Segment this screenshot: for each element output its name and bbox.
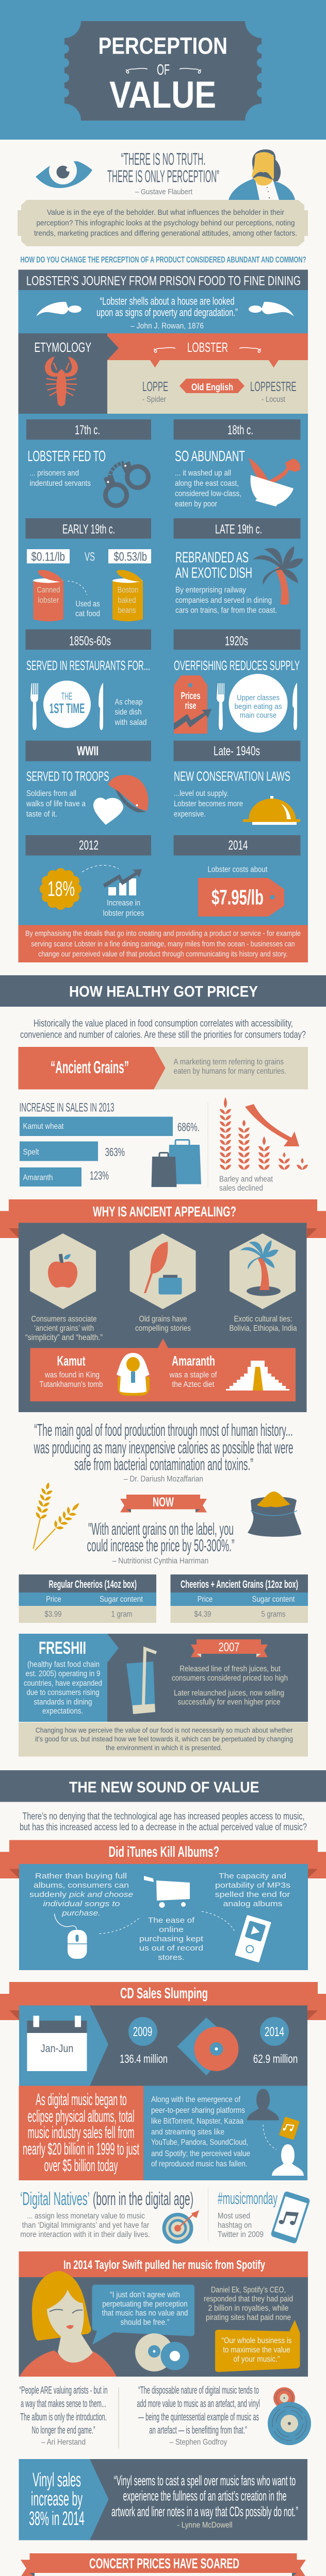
icon: rising chart bbox=[103, 869, 142, 895]
panel: peer to peer sharing: like BitTorrent, Napster, Kazaa bbox=[151, 2117, 243, 2126]
table: regular cheerios bbox=[19, 1574, 156, 1623]
icon: eye bbox=[36, 157, 92, 188]
timeline: WWII: SERVED TO TROOPS bbox=[26, 769, 109, 784]
icon: lobster shells bbox=[36, 302, 294, 316]
icon: declining wheat chart bbox=[219, 1097, 308, 1193]
banner: 2007 bbox=[191, 1639, 268, 1657]
stat: 2014 sales bbox=[253, 2017, 298, 2065]
etymology words: LOPPE bbox=[142, 379, 168, 394]
etymology words: - Locust bbox=[262, 395, 286, 404]
timeline: WWII: walks of life have a bbox=[26, 800, 86, 808]
timeline: 18th century: 18th c. bbox=[227, 423, 253, 437]
timeline: 1850s-60s: side dish bbox=[115, 708, 141, 717]
panel: ancient grains definition: eaten by humans for many centuries. bbox=[173, 1067, 286, 1076]
timeline: 1850s-60s bbox=[26, 630, 151, 730]
speech bubble: Ek quote: to maximise the value bbox=[223, 2346, 290, 2354]
panel: freshii: standards in dining bbox=[34, 1698, 92, 1706]
music intro text bbox=[20, 1811, 307, 1833]
timeline: early 19th century: $0.53/lb bbox=[113, 550, 147, 564]
Harriman quote bbox=[87, 1519, 234, 1565]
pick and choose text: pick and choose bbox=[69, 1891, 133, 1899]
speech bubble: swift quote: should be free.” bbox=[121, 2318, 169, 2327]
panel: freshii: FRESHII bbox=[39, 1638, 86, 1658]
intro plaque bbox=[18, 200, 308, 246]
timeline: late 19th century: companies and served in dining bbox=[175, 596, 272, 605]
digital natives block: than ‘Digital Immigrants’ and yet have far bbox=[22, 2221, 149, 2230]
reason: simplicity and health: Consumers associate bbox=[31, 1315, 97, 1324]
mp3 text: analog albums bbox=[223, 1900, 283, 1908]
panel: freshii: Later relaunched juices, now selling bbox=[174, 1689, 284, 1698]
mp3 text: spelled the end for bbox=[215, 1891, 290, 1899]
table: regular cheerios: Regular Cheerios (14oz box) bbox=[48, 1579, 137, 1590]
table: ancient grains cheerios: Sugar content bbox=[252, 1595, 295, 1604]
callout: kamut and amaranth stories: the Aztec diet bbox=[172, 1380, 215, 1389]
Mozaffarian quote: – Dr. Dariush Mozaffarian bbox=[124, 1475, 203, 1484]
panel: peer to peer sharing: Along with the emergence of bbox=[151, 2095, 240, 2104]
table: ancient grains cheerios: 5 grams bbox=[261, 1610, 286, 1619]
table: ancient grains cheerios: Price bbox=[198, 1595, 213, 1604]
musicmonday block: Twitter in 2009 bbox=[218, 2230, 264, 2239]
stat: 2014 sales: 62.9 million bbox=[253, 2052, 298, 2065]
section heading: new sound of value: THE NEW SOUND OF VALUE bbox=[69, 1779, 259, 1796]
panel: vinyl sales: increase by bbox=[31, 2488, 83, 2510]
online purchasing text: purchasing kept bbox=[139, 1935, 203, 1943]
timeline: late 19th century: AN EXOTIC DISH bbox=[175, 565, 252, 581]
section heading: new sound of value bbox=[0, 1770, 326, 1802]
callout: kamut and amaranth stories: Kamut bbox=[57, 1353, 86, 1368]
digital natives block: ... assign less monetary value to music bbox=[27, 2212, 145, 2221]
callout: kamut and amaranth stories: Tutankhamun's tomb bbox=[39, 1380, 103, 1389]
timeline: 18th century bbox=[173, 419, 300, 509]
speech bubble: swift quote: that music has no value and bbox=[102, 2309, 188, 2317]
timeline: WWII bbox=[26, 741, 151, 825]
icon: lobster can: lobster bbox=[38, 596, 59, 605]
reason: compelling stories: compelling stories bbox=[135, 1324, 191, 1333]
stat: 2009 sales: 136.4 million bbox=[120, 2052, 168, 2065]
timeline: late 1940s: expensive. bbox=[174, 810, 206, 819]
health intro text bbox=[20, 1018, 306, 1041]
timeline: 18th century: eaten by poor bbox=[175, 500, 217, 509]
timeline: late 19th century: By enterprising railway bbox=[175, 586, 246, 595]
price tag: $7.95/lb bbox=[211, 885, 264, 909]
callout: industry sales fall: music industry sales fell from bbox=[28, 2123, 134, 2142]
panel: ancient grains definition: A marketing term referring to grains bbox=[173, 1058, 284, 1066]
bar chart: increase in sales: 686%. bbox=[177, 1120, 200, 1133]
cat food note bbox=[68, 581, 100, 618]
panel: peer to peer sharing: of reproduced music has fallen. bbox=[151, 2160, 248, 2168]
Godfroy quote: – Stephen Godfroy bbox=[170, 2438, 227, 2447]
table: regular cheerios: 1 gram bbox=[111, 1610, 132, 1619]
timeline: 1850s-60s: with salad bbox=[115, 718, 146, 727]
timeline: WWII: Soldiers from all bbox=[26, 789, 76, 798]
musicmonday block: Most used bbox=[218, 2212, 250, 2221]
callout: industry sales fall: over $5 billion today bbox=[44, 2156, 118, 2175]
panel: peer to peer sharing: and Spotify; the perceived value bbox=[151, 2149, 250, 2158]
bar chart: increase in sales: Kamut wheat bbox=[23, 1122, 64, 1131]
title: VALUE bbox=[109, 74, 216, 116]
intro plaque: Value is in the eye of the beholder. But what influences the beholder in their bbox=[47, 208, 284, 217]
timeline: 17th century: indentured servants bbox=[30, 479, 91, 488]
timeline: 1850s-60s: SERVED IN RESTAURANTS FOR... bbox=[26, 657, 150, 673]
panel: freshii: due to consumers rising bbox=[27, 1688, 99, 1697]
musicmonday block bbox=[218, 2189, 311, 2244]
timeline: 17th century: ... prisoners and bbox=[30, 469, 79, 478]
icon: compact disc bbox=[177, 2018, 238, 2075]
speech bubble: swift quote: perpetuating the perception bbox=[102, 2300, 188, 2309]
price tag bbox=[198, 878, 284, 917]
icon: plate and cutlery: 1ST TIME bbox=[50, 701, 85, 716]
stat: 2014 sales: 2014 bbox=[265, 2025, 284, 2039]
panel: freshii bbox=[19, 1634, 308, 1722]
banner: 2007: 2007 bbox=[219, 1640, 239, 1654]
icon: main course plate: begin eating as bbox=[234, 702, 282, 711]
icon: lobster can: Canned bbox=[37, 586, 60, 595]
callout: industry sales fall: As digital music began to bbox=[36, 2090, 127, 2109]
cat food note: cat food bbox=[75, 609, 100, 618]
cat food note: Used as bbox=[75, 600, 100, 608]
mp3 text bbox=[215, 1872, 290, 1908]
timeline: 2014 bbox=[173, 835, 300, 917]
panel: peer to peer sharing bbox=[143, 2086, 307, 2180]
cd heading: CD Sales Slumping bbox=[120, 1986, 208, 2002]
intro plaque: perception? This infographic looks at the psychology behind our perceptions, noting bbox=[36, 218, 295, 228]
bar chart: increase in sales: 363% bbox=[105, 1145, 125, 1159]
icon: calendar bbox=[27, 2015, 87, 2071]
reason: simplicity and health: ‘ancient grains’ with bbox=[34, 1324, 94, 1333]
timeline: 1920s bbox=[173, 630, 300, 734]
bar chart: increase in sales bbox=[20, 1100, 200, 1187]
icon: shopping bags bbox=[152, 1140, 201, 1187]
badge: 18 percent bbox=[40, 868, 82, 910]
icon: price tag rising: Prices bbox=[181, 691, 200, 702]
lobster word: LOBSTER bbox=[187, 340, 228, 355]
timeline: 2014: Lobster costs about bbox=[207, 866, 268, 874]
online purchasing text: online bbox=[159, 1926, 184, 1934]
speech bubble: swift quote: “I just don’t agree with bbox=[110, 2291, 180, 2299]
icon: shopping cart bbox=[144, 1876, 190, 1908]
icon: target bbox=[162, 2210, 199, 2244]
panel: vinyl sales bbox=[19, 2459, 307, 2540]
Daniel Ek response: 2 billion in royalties, while bbox=[208, 2304, 289, 2313]
stat: 2009 sales: 2009 bbox=[133, 2025, 152, 2039]
timeline: late 1940s: Lobster becomes more bbox=[174, 800, 243, 808]
reason: compelling stories: Old grains have bbox=[139, 1315, 187, 1324]
Herstand quote: – Ari Herstand bbox=[41, 2438, 86, 2447]
timeline: WWII: WWII bbox=[77, 744, 99, 758]
Godfroy quote: an artefact — is benefitting from that.” bbox=[149, 2425, 247, 2436]
Herstand quote: “People ARE valuing artists - but in bbox=[20, 2385, 108, 2396]
timeline: early 19th century: VS bbox=[85, 550, 95, 564]
icon: mortar with claws bbox=[249, 458, 300, 506]
table: ancient grains cheerios: $4.39 bbox=[194, 1610, 211, 1619]
callout: industry sales fall bbox=[19, 2086, 143, 2180]
Flaubert quote: – Gustave Flaubert bbox=[135, 188, 193, 196]
musicmonday block: hashtag on bbox=[218, 2221, 252, 2230]
online purchasing text bbox=[139, 1917, 203, 1962]
musicmonday block: #musicmonday bbox=[218, 2189, 278, 2208]
digital natives block bbox=[20, 2188, 199, 2244]
timeline: WWII: taste of it. bbox=[26, 810, 57, 819]
icon: main course plate bbox=[217, 674, 297, 733]
panel: cd sales slumping bbox=[0, 1982, 326, 2180]
panel: vinyl sales: 38% in 2014 bbox=[29, 2508, 85, 2530]
Rowan quote: – John J. Rowan, 1876 bbox=[131, 321, 204, 331]
food takeaway band: the environment in which it is presented. bbox=[106, 1743, 222, 1752]
timeline: late 1940s: Late- 1940s bbox=[214, 744, 260, 758]
icon: file sharing people bbox=[247, 2089, 304, 2176]
illustration: Taylor Swift bbox=[20, 2271, 117, 2377]
icon: grain sack bbox=[248, 1492, 301, 1537]
food takeaway band: Changing how we perceive the value of our food is not necessarily so much about whether bbox=[36, 1726, 293, 1734]
timeline: early 19th century: EARLY 19th c. bbox=[62, 522, 115, 537]
icon: beans can: Boston bbox=[118, 586, 138, 595]
panel: vinyl sales: Vinyl sales bbox=[32, 2469, 81, 2491]
timeline: 17th century bbox=[26, 419, 151, 506]
panel: peer to peer sharing: and streaming sites like bbox=[151, 2128, 224, 2137]
timeline: late 19th century: cars on trains, far from the coast. bbox=[175, 606, 277, 615]
timeline: 1850s-60s: 1850s-60s bbox=[69, 634, 111, 648]
Harriman quote: – Nutritionist Cynthia Harriman bbox=[112, 1557, 208, 1565]
timeline: 1920s: 1920s bbox=[225, 634, 248, 648]
panel: taylor swift and spotify bbox=[19, 2251, 308, 2377]
table: ancient grains cheerios bbox=[170, 1574, 308, 1623]
timeline: late 1940s: ...level out supply. bbox=[174, 789, 229, 798]
timeline: 17th century: 17th c. bbox=[75, 423, 100, 437]
speech bubble: Ek quote bbox=[215, 2320, 300, 2372]
pick and choose text bbox=[29, 1872, 133, 1918]
table: regular cheerios: Sugar content bbox=[100, 1595, 143, 1604]
bar chart: increase in sales: INCREASE IN SALES IN 2013 bbox=[20, 1100, 115, 1115]
intro plaque: trends, marketing practices and differing generational attitudes, among other factors. bbox=[34, 229, 297, 238]
icon: pharaoh bbox=[117, 1353, 150, 1396]
panel: lobster journey bbox=[19, 270, 308, 962]
icon: helmet and heart bbox=[93, 775, 149, 825]
reason: exotic ties: Exotic cultural ties: bbox=[234, 1315, 292, 1324]
digital natives block: ‘Digital Natives’ bbox=[20, 2188, 90, 2209]
title: PERCEPTION bbox=[98, 33, 227, 59]
icon: price tag rising: rise bbox=[185, 701, 196, 711]
reason: exotic ties: Bolivia, Ethiopia, India bbox=[229, 1324, 297, 1333]
Herstand quote: No longer the end game.” bbox=[32, 2425, 95, 2436]
online purchasing text: us out of record bbox=[139, 1944, 203, 1953]
etymology heading: ETYMOLOGY bbox=[34, 340, 91, 355]
icon: declining wheat chart: Barley and wheat bbox=[219, 1175, 273, 1184]
callout: kamut and amaranth stories: Amaranth bbox=[172, 1353, 215, 1368]
icon: wheat ears bbox=[27, 1481, 84, 1555]
icon: lobster can bbox=[33, 570, 63, 621]
lobster takeaway band bbox=[19, 925, 308, 962]
food takeaway band: it’s good for us, but instead how we feel towards it, which can be perpetuated by changing bbox=[35, 1735, 293, 1743]
timeline: 2012 bbox=[26, 835, 151, 918]
icon: plate and cutlery bbox=[30, 681, 103, 730]
timeline: late 19th century: LATE 19th c. bbox=[215, 522, 262, 537]
icon: main course plate: main course bbox=[240, 711, 276, 720]
panel: peer to peer sharing: YouTube, Pandora, SoundCloud, bbox=[151, 2138, 248, 2147]
online purchasing text: stores. bbox=[158, 1954, 185, 1962]
icon: mp3 player bbox=[235, 1915, 271, 1963]
callout: industry sales fall: eclipse physical albums, total bbox=[28, 2107, 134, 2126]
panel: ancient grains definition bbox=[19, 1047, 308, 1089]
panel: freshii: consumers considered priced too high bbox=[172, 1674, 288, 1683]
banner: concert prices bbox=[21, 2553, 306, 2576]
digital natives block: (born in the digital age) bbox=[93, 2188, 193, 2209]
pick and choose text: Rather than buying full bbox=[35, 1872, 127, 1880]
callout: kamut and amaranth stories: was a staple of bbox=[169, 1370, 217, 1380]
icon: computer mouse bbox=[55, 1913, 87, 1959]
why ancient heading: WHY IS ANCIENT APPEALING? bbox=[93, 1204, 236, 1219]
icon: juice glass bbox=[126, 1649, 156, 1714]
digital natives block: more interaction with it in their daily lives. bbox=[20, 2230, 150, 2239]
section heading: how healthy got pricey: HOW HEALTHY GOT PRICEY bbox=[69, 983, 258, 1001]
panel: freshii: successfully for even higher price bbox=[177, 1698, 281, 1706]
icon: Flaubert portrait bbox=[229, 149, 295, 200]
panel: freshii: (healthy fast food chain bbox=[27, 1660, 100, 1669]
section heading: how healthy got pricey bbox=[0, 975, 326, 1007]
reason: exotic ties bbox=[229, 1233, 297, 1333]
timeline: 18th century: along the east coast, bbox=[175, 479, 239, 488]
Godfroy quote bbox=[137, 2385, 260, 2447]
timeline: 2012: lobster prices bbox=[103, 909, 144, 918]
speech bubble: swift quote bbox=[92, 2284, 194, 2345]
Herstand quote bbox=[20, 2385, 108, 2447]
banner: now: NOW bbox=[153, 1495, 174, 1510]
pick and choose text: individual songs to bbox=[43, 1900, 120, 1908]
ticket title plate bbox=[64, 21, 262, 121]
panel: peer to peer sharing: peer-to-peer sharing platforms bbox=[151, 2106, 245, 2115]
lobster word bbox=[154, 340, 261, 355]
icon: declining wheat chart: sales declined bbox=[219, 1184, 263, 1193]
Daniel Ek response: Daniel Ek, Spotify’s CEO, bbox=[211, 2285, 286, 2295]
callout: kamut and amaranth stories bbox=[30, 1338, 296, 1401]
icon: phone bbox=[270, 2191, 311, 2244]
icon: price tag rising bbox=[174, 675, 211, 734]
panel: freshii: Released line of fresh juices, but bbox=[180, 1665, 281, 1673]
timeline: 2012: 2012 bbox=[79, 838, 99, 853]
panel: freshii: expectations. bbox=[42, 1707, 83, 1716]
panel: ancient grains definition: “Ancient Grains” bbox=[51, 1058, 129, 1077]
speech bubble: Ek quote: of your music.” bbox=[233, 2355, 280, 2364]
panel: vinyl sales: - Lynne McDowell bbox=[177, 2521, 232, 2530]
reason: compelling stories bbox=[130, 1233, 196, 1333]
Rowan quote: “Lobster shells about a house are looked bbox=[100, 296, 234, 307]
pick and choose text: purchase. bbox=[61, 1909, 101, 1918]
mp3 text: The capacity and bbox=[219, 1872, 286, 1880]
Daniel Ek response bbox=[204, 2285, 293, 2322]
Rowan quote: upon as signs of poverty and degradation.” bbox=[96, 307, 238, 318]
timeline: 18th century: ... it washed up all bbox=[175, 469, 231, 478]
icon: beans can: beans bbox=[118, 606, 136, 615]
title: OF bbox=[157, 62, 170, 78]
Rowan quote bbox=[96, 296, 238, 331]
title bbox=[98, 33, 227, 116]
timeline: 18th century: SO ABUNDANT bbox=[175, 448, 245, 465]
reason: simplicity and health: “simplicity” and “health.” bbox=[25, 1333, 103, 1342]
table: regular cheerios: Price bbox=[46, 1595, 61, 1604]
icon: main course plate: Upper classes bbox=[237, 693, 280, 702]
timeline: late 1940s bbox=[173, 741, 300, 825]
etymology words: Old English bbox=[191, 382, 233, 393]
icon: beans can: baked bbox=[118, 596, 136, 605]
Mozaffarian quote bbox=[34, 1420, 294, 1484]
header band bbox=[0, 0, 326, 140]
panel: freshii: countries, have expanded bbox=[24, 1679, 102, 1688]
banner: now bbox=[120, 1495, 207, 1513]
Herstand quote: The album is only the introduction. bbox=[20, 2412, 107, 2423]
icon: beans can bbox=[112, 570, 143, 621]
pick and choose text: albums, consumers can bbox=[34, 1882, 129, 1890]
timeline: 18th century: considered low-class, bbox=[175, 489, 241, 498]
icon: calendar: Jan-Jun bbox=[41, 2043, 73, 2055]
timeline: 1850s-60s: As cheap bbox=[115, 698, 142, 707]
pick and choose text: suddenly bbox=[29, 1891, 67, 1899]
panel: etymology bbox=[19, 333, 308, 414]
Flaubert quote: “THERE IS NO TRUTH. bbox=[121, 149, 205, 168]
panel: freshii: est. 2005) operating in 9 bbox=[26, 1669, 100, 1679]
icon: lobster bbox=[45, 357, 78, 406]
icon: aztec pyramid bbox=[226, 1361, 289, 1391]
online purchasing text: The ease of bbox=[148, 1917, 195, 1925]
timeline: 17th century: LOBSTER FED TO bbox=[28, 448, 106, 465]
mp3 text: portability of MP3s bbox=[215, 1882, 290, 1890]
callout: kamut and amaranth stories: was found in King bbox=[44, 1370, 100, 1380]
etymology words: - Spider bbox=[142, 395, 166, 404]
etymology words bbox=[142, 379, 296, 404]
bar chart: increase in sales: Spelt bbox=[23, 1148, 39, 1157]
callout: industry sales fall: nearly $20 billion in 1999 to just bbox=[23, 2140, 139, 2158]
icon: vinyl discs bbox=[135, 2333, 189, 2371]
timeline: late 19th century bbox=[173, 518, 303, 615]
Herstand quote: a way that makes sense to them... bbox=[21, 2398, 106, 2410]
timeline: late 19th century: REBRANDED AS bbox=[175, 549, 249, 566]
bar chart: increase in sales: Amaranth bbox=[23, 1174, 53, 1182]
timeline: early 19th century: $0.11/lb bbox=[31, 550, 65, 564]
timeline: 2014: 2014 bbox=[228, 838, 248, 853]
timeline: early 19th century bbox=[26, 518, 151, 621]
icon: plate and cutlery: THE bbox=[61, 691, 72, 702]
panel: did itunes kill albums bbox=[0, 1840, 326, 1970]
icon: vinyl records bbox=[268, 2387, 311, 2445]
banner: concert prices: CONCERT PRICES HAVE SOARED bbox=[89, 2555, 239, 2571]
panel: why is ancient appealing bbox=[0, 1199, 326, 1412]
reason: simplicity and health bbox=[25, 1233, 103, 1342]
itunes heading: Did iTunes Kill Albums? bbox=[108, 1844, 219, 1860]
icon: palm tree bbox=[253, 546, 303, 605]
badge: 18 percent: 18% bbox=[47, 877, 75, 901]
Flaubert quote bbox=[107, 149, 219, 196]
Daniel Ek response: responded that they had paid bbox=[204, 2295, 293, 2303]
bar chart: increase in sales: 123% bbox=[90, 1168, 109, 1182]
icon: handcuffs bbox=[104, 461, 149, 506]
icon: cloche bbox=[243, 796, 300, 825]
timeline: 2012: Increase in bbox=[107, 899, 140, 908]
table: regular cheerios: $3.99 bbox=[44, 1610, 62, 1619]
Daniel Ek response: pirating sites had paid none bbox=[206, 2313, 291, 2322]
stat: 2009 sales bbox=[120, 2017, 168, 2065]
speech bubble: Ek quote: “Our whole business is bbox=[222, 2336, 292, 2345]
food takeaway band bbox=[19, 1722, 308, 1757]
